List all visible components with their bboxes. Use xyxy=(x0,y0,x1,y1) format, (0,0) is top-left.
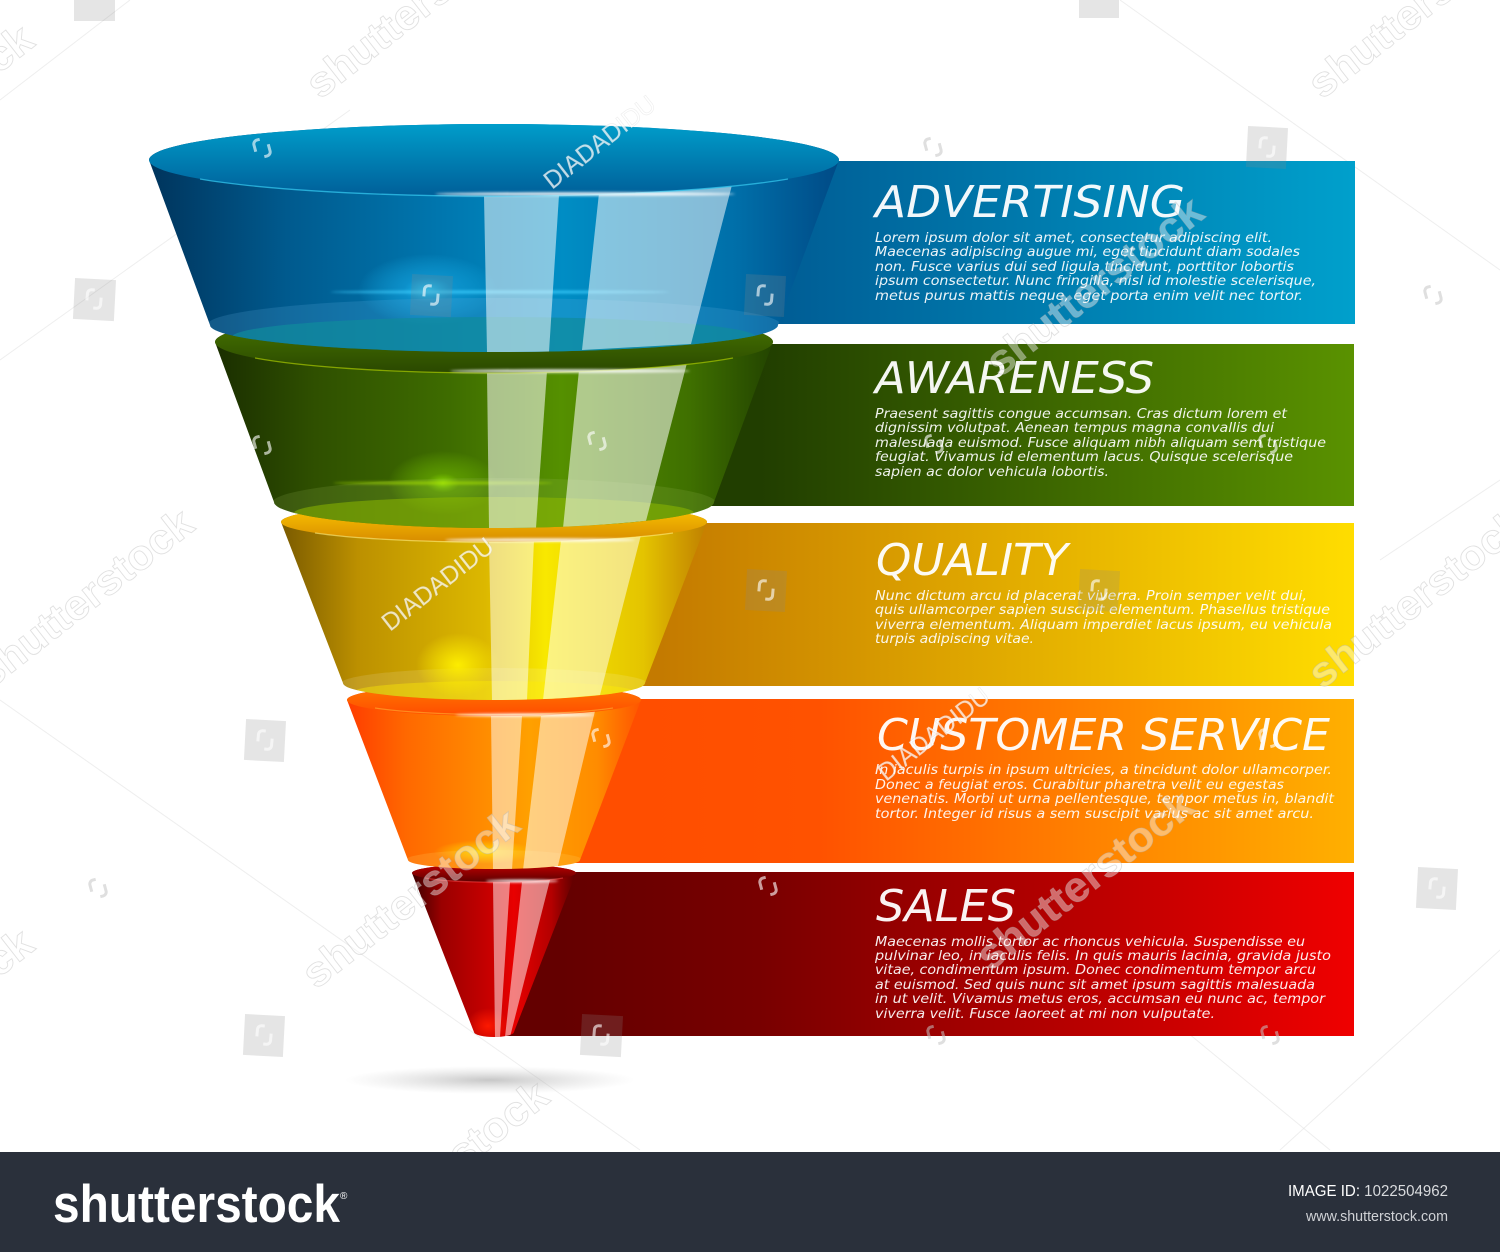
quality body text: viverra elementum. Aliquam imperdiet lacus ipsum, eu vehicula xyxy=(875,617,1332,633)
sales heading: SALES xyxy=(876,881,1016,932)
awareness body text xyxy=(875,406,1326,480)
author watermarks xyxy=(376,90,995,787)
funnel xyxy=(149,124,839,1044)
quality band xyxy=(560,523,1354,686)
advertising body text: Maecenas adipiscing augue mi, eget tincidunt diam sodales xyxy=(875,244,1300,260)
sales body text xyxy=(874,934,1331,1022)
awareness body text: Praesent sagittis congue accumsan. Cras dictum lorem et xyxy=(875,406,1288,422)
customer service body text: In iaculis turpis in ipsum ultricies, a tincidunt dolor ullamcorper. xyxy=(875,762,1332,778)
panel: awareness xyxy=(600,344,1354,506)
shutterstock watermarks: shutterstock xyxy=(967,780,1203,979)
advertising body text: non. Fusce varius dui sed ligula tincidunt, porttitor lobortis xyxy=(875,259,1294,275)
customer service band xyxy=(530,699,1354,863)
image id: IMAGE ID: 1022504962 xyxy=(1288,1183,1448,1200)
quality heading: QUALITY xyxy=(876,535,1071,586)
advertising body text: ipsum consectetur. Nunc fringilla, nisl id molestie scelerisque, xyxy=(875,273,1316,289)
footer bar xyxy=(0,1152,1500,1252)
customer service body text xyxy=(875,762,1335,822)
sales body text: at euismod. Sed quis nunc sit amet ipsum sagittis malesuada xyxy=(875,977,1315,993)
funnel segment: orange xyxy=(347,684,641,870)
advertising band xyxy=(650,161,1355,324)
small watermark glyphs xyxy=(89,136,1442,1046)
registered mark: ® xyxy=(340,1191,348,1202)
funnel segment: blue xyxy=(149,124,839,357)
shutterstock watermarks: shutterstock xyxy=(293,798,529,997)
footer logo: shutterstock xyxy=(53,1175,340,1234)
advertising body text: metus purus mattis neque, eget porta enim velit nec tortor. xyxy=(875,288,1303,304)
awareness body text: feugiat. Vivamus id elementum lacus. Quisque scelerisque xyxy=(875,449,1293,465)
awareness body text: dignissim volutpat. Aenean tempus magna convallis dui xyxy=(875,420,1274,436)
sales band xyxy=(500,872,1354,1036)
sales body text: vitae, condimentum ipsum. Donec condimentum tempor arcu xyxy=(875,962,1316,978)
funnel ground shadow xyxy=(345,1066,635,1094)
panel: sales xyxy=(500,872,1354,1036)
awareness body text: malesuada euismod. Fusce aliquam nibh aliquam sem tristique xyxy=(875,435,1326,451)
advertising body text: Lorem ipsum dolor sit amet, consectetur adipiscing elit. xyxy=(875,230,1272,246)
sales body text: Maecenas mollis tortor ac rhoncus vehicula. Suspendisse eu xyxy=(875,934,1305,950)
awareness band xyxy=(600,344,1354,506)
advertising body text xyxy=(875,230,1316,304)
website: www.shutterstock.com xyxy=(1305,1208,1448,1225)
panel: customer service xyxy=(530,699,1354,863)
funnel segment: green xyxy=(215,334,773,528)
customer service body text: Donec a feugiat eros. Curabitur pharetra velit eu egestas xyxy=(875,777,1284,793)
advertising heading: ADVERTISING xyxy=(872,177,1185,228)
customer service body text: tortor. Integer id risus a sem suscipit varius ac sit amet arcu. xyxy=(875,806,1314,822)
panel: advertising xyxy=(650,161,1355,324)
funnel segment: red xyxy=(412,864,576,1044)
author watermarks: DIADADIDU xyxy=(376,532,499,637)
customer service heading: CUSTOMER SERVICE xyxy=(877,710,1330,761)
customer service body text: venenatis. Morbi ut urna pellentesque, tempor metus in, blandit xyxy=(875,791,1335,807)
sales body text: viverra velit. Fusce laoreet at mi non vulputate. xyxy=(875,1006,1215,1022)
quality body text: turpis adipiscing vitae. xyxy=(875,631,1034,647)
square watermark marks xyxy=(73,0,1458,1057)
quality body text: quis ullamcorper sapien suscipit elementum. Phasellus tristique xyxy=(875,602,1330,618)
quality body text xyxy=(875,588,1332,647)
funnel segment: yellow xyxy=(281,502,707,703)
sales body text: pulvinar leo, in iaculis felis. In quis mauris lacinia, gravida justo xyxy=(874,948,1331,964)
awareness heading: AWARENESS xyxy=(872,353,1154,404)
author watermarks: DIADADIDU xyxy=(538,90,661,195)
awareness body text: sapien ac dolor vehicula lobortis. xyxy=(875,464,1109,480)
quality body text: Nunc dictum arcu id placerat viverra. Proin semper velit dui, xyxy=(875,588,1307,604)
panel: quality xyxy=(560,523,1354,686)
author watermarks: DIADADIDU xyxy=(872,682,995,787)
sales body text: in ut velit. Vivamus metus eros, accumsan eu nunc ac, tempor xyxy=(875,991,1327,1007)
shutterstock watermarks: shutterstock xyxy=(977,186,1213,385)
